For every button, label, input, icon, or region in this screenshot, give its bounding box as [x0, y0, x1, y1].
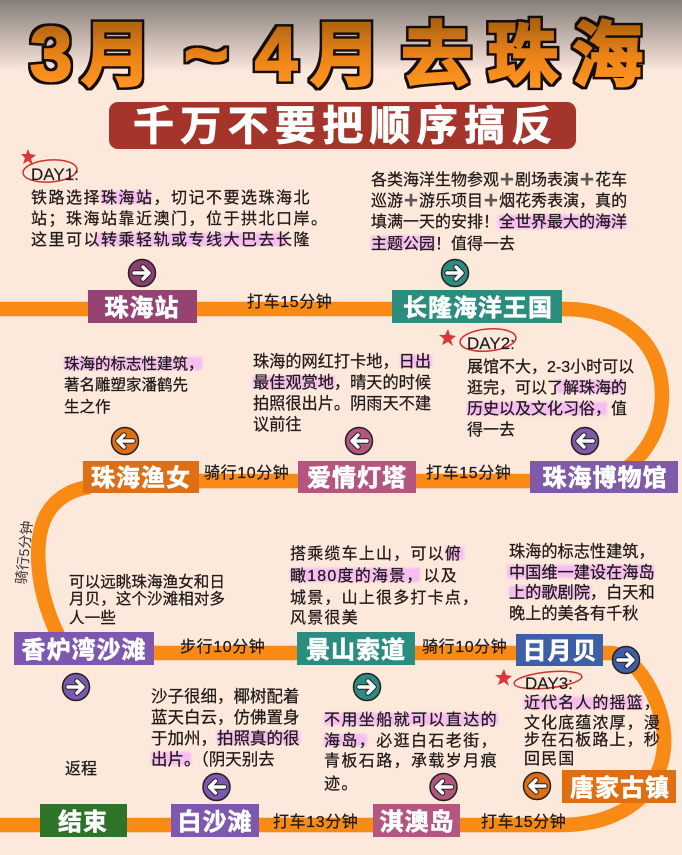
transit label: taxi 15 min: 打车15分钟 [426, 464, 511, 482]
station: Chimelong: 长隆海洋王国 [403, 295, 553, 322]
arrow: Jingshan [354, 674, 380, 700]
text block: day 1 Zhuhai station: 铁路选择珠海站，切记不要选珠海北 [31, 189, 311, 207]
transit label: ride 10 min: 骑行10分钟 [204, 464, 289, 482]
title: 珠 [487, 17, 558, 96]
title: 去 [401, 17, 472, 96]
text block: day 3 Tangjia town [495, 668, 661, 768]
day 1 circled label: DAY1: [31, 165, 79, 184]
text block: Jingshan cableway: 搭乘缆车上山，可以俯 [290, 545, 462, 563]
transit label: rotated ride 5 min: 骑行5分钟 [13, 520, 35, 585]
text block: Sun moon shell: 上的歌剧院，白天和 [509, 584, 655, 602]
transit label: walk 10 min: 步行10分钟 [180, 638, 265, 656]
arrow: Tangjia town [524, 772, 550, 800]
text block: Baisha beach: 出片。（阴天别去 [151, 750, 275, 769]
station: Tangjia town: 唐家古镇 [570, 775, 670, 802]
text block: Xianglu bay: 可以远眺珠海渔女和日 [69, 572, 225, 591]
text label: return trip: 返程 [65, 760, 97, 778]
text block: Qi'ao island: 青板石路，承载岁月痕 [324, 752, 498, 770]
text block: day 3 Tangjia town: 近代名人的摇篮， [524, 694, 661, 712]
station: Qi'ao island: 淇澳岛 [380, 809, 454, 836]
station: Zhuhai station [88, 290, 197, 323]
arrow: lighthouse [346, 428, 372, 454]
text block: day 2 museum [439, 327, 634, 439]
text block: Baisha beach: 蓝天白云，仿佛置身 [151, 708, 300, 727]
title [30, 12, 643, 97]
text block: fisher girl: 珠海的标志性建筑， [64, 355, 204, 373]
station: Baisha beach [171, 804, 259, 837]
text block: day 1 Zhuhai station: 这里可以转乘轻轨或专线大巴去长隆 [31, 231, 311, 249]
text block: Baisha beach: 于加州，拍照真的很 [151, 729, 300, 748]
text block: fisher girl: 著名雕塑家潘鹤先 [64, 376, 188, 394]
station: Xianglu bay beach: 香炉湾沙滩 [22, 636, 146, 664]
arrow: museum [572, 428, 598, 454]
text block: day 1 Zhuhai station [21, 149, 329, 249]
icon: red star [21, 149, 36, 165]
title: 月 [310, 17, 381, 96]
station: museum: 珠海博物馆 [542, 465, 668, 492]
title: 4 [255, 12, 297, 97]
text block: fisher girl [64, 355, 204, 416]
station: end: 结束 [58, 809, 108, 836]
text block: Sun moon shell: 中国维一建设在海岛 [509, 564, 655, 582]
text block: day 2 museum: 逛完，可以了解珠海的 [467, 379, 627, 397]
transit label: ride 10 min: 骑行10分钟 [422, 638, 507, 656]
text block: day 3 Tangjia town: 回民国 [524, 751, 575, 768]
title: 海 [572, 17, 643, 96]
arrow: Zhuhai station [128, 260, 156, 286]
title: 月 [81, 17, 152, 96]
day 2 circled label [459, 327, 517, 353]
station: lovers lighthouse: 爱情灯塔 [307, 465, 407, 492]
station: Baisha beach: 白沙滩 [178, 809, 252, 836]
text block: Baisha beach: 沙子很细，椰树配着 [151, 687, 300, 706]
icon: red star [495, 669, 512, 686]
text block: Xianglu bay: 月贝，这个沙滩相对多 [69, 590, 225, 608]
day 1 circled label [22, 158, 79, 184]
text block: day 3 Tangjia town: 文化底蕴浓厚，漫 [524, 714, 661, 732]
text block: Chimelong ocean kingdom [371, 171, 627, 253]
text block: Jingshan cableway: 城景，山上很多打卡点， [290, 589, 479, 607]
text block: lovers lighthouse: 珠海的网红打卡地，日出 [253, 353, 431, 371]
text block: Jingshan cableway [290, 545, 479, 627]
day 3 circled label: DAY3: [525, 674, 573, 693]
title: ~ [184, 12, 228, 97]
arrow: fisher girl [112, 428, 138, 454]
text block: day 2 museum: 得一去 [467, 421, 515, 439]
title: 3 [30, 12, 72, 97]
text block: lovers lighthouse: 拍照很出片。阴雨天不建 [253, 395, 431, 413]
text block: Chimelong ocean kingdom: 主题公园！值得一去 [371, 235, 515, 253]
arrow: Baisha beach [203, 774, 230, 800]
text block: Xianglu bay [69, 572, 225, 627]
text block: Xianglu bay: 人一些 [69, 609, 116, 627]
text block: Chimelong ocean kingdom: 各类海洋生物参观＋剧场表演＋花车 [371, 172, 627, 189]
arrow: Qi'ao island [430, 774, 457, 800]
route line [0, 309, 664, 825]
station: Zhuhai station: 珠海站 [104, 295, 180, 322]
text block: day 2 museum: 展馆不大，2-3小时可以 [467, 358, 634, 376]
transit label: taxi 15 min: 打车15分钟 [247, 293, 332, 311]
transit label: taxi 13 min: 打车13分钟 [273, 813, 358, 831]
text block: day 1 Zhuhai station: 站；珠海站靠近澳门，位于拱北口岸。 [31, 210, 329, 228]
day 2 circled label: DAY2: [467, 334, 515, 353]
text block: Sun moon shell: 珠海的标志性建筑， [509, 543, 655, 561]
station: end [40, 804, 127, 837]
text block: Baisha beach [151, 687, 300, 769]
transit label: taxi 15 min: 打车15分钟 [481, 813, 566, 831]
text block: Qi'ao island: 海岛，必逛白石老街， [324, 732, 498, 750]
text block: Jingshan cableway: 瞰180度的海景，以及 [290, 567, 458, 585]
day 3 circled label [513, 668, 583, 693]
text block: lovers lighthouse: 最佳观赏地，晴天的时候 [253, 374, 431, 392]
text block: Sun moon shell [507, 543, 655, 623]
subtitle banner: 千万不要把顺序搞反 [133, 103, 559, 149]
text block: fisher girl: 生之作 [64, 398, 111, 416]
text block: Chimelong ocean kingdom: 巡游＋游乐项目＋烟花秀表演，真的 [371, 193, 627, 210]
text block: Sun moon shell: 晚上的美各有千秋 [509, 605, 638, 623]
text block: Jingshan cableway: 风景很美 [290, 609, 359, 627]
text block: Chimelong ocean kingdom: 填满一天的安排！全世界最大的海洋 [371, 213, 627, 231]
arrow: Xianglu bay [62, 674, 90, 700]
arrow: Sun moon shell [612, 646, 640, 674]
icon: red star [439, 329, 456, 346]
text block: Qi'ao island: 不用坐船就可以直达的 [324, 711, 498, 729]
station: Sun moon shell: 日月贝 [522, 638, 598, 665]
text block: Qi'ao island: 迹。 [324, 775, 359, 793]
arrow: Chimelong [442, 260, 468, 286]
text block: Qi'ao island [324, 711, 498, 793]
text block: day 2 museum: 历史以及文化习俗，值 [467, 400, 627, 418]
station: Jingshan cableway: 景山索道 [306, 637, 406, 664]
text block: day 3 Tangjia town: 步在石板路上，秒 [524, 731, 661, 749]
text block: lovers lighthouse [253, 353, 432, 434]
station: fisher girl: 珠海渔女 [91, 465, 191, 492]
station: Jingshan cableway [297, 632, 415, 665]
text block: lovers lighthouse: 议前往 [253, 416, 302, 434]
